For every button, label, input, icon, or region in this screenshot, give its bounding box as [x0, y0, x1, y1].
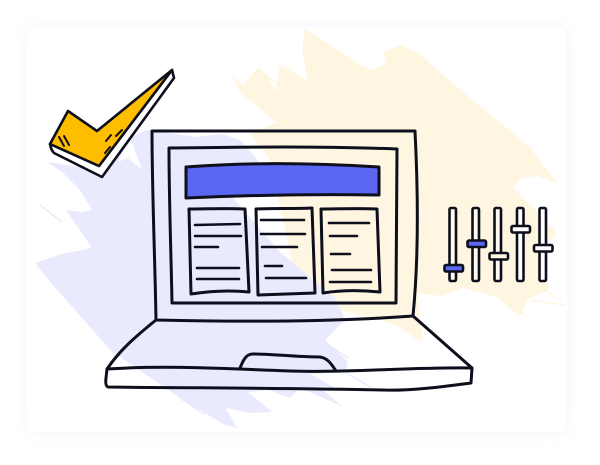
slider 1 — [444, 208, 463, 281]
trackpad notch — [240, 354, 336, 371]
white streaks — [118, 137, 142, 170]
slider 5 — [534, 208, 552, 281]
brush stroke: blue — [35, 130, 372, 428]
laptop keyboard deck — [107, 320, 156, 369]
check mark side — [50, 70, 174, 177]
laptop front edge — [106, 367, 472, 390]
content panel 1 — [189, 209, 249, 294]
laptop screen inner — [169, 147, 397, 303]
slider 3 — [490, 208, 508, 281]
header bar — [186, 164, 379, 198]
slider 2 — [468, 208, 486, 281]
laptop screen outer — [152, 131, 417, 321]
yellow brush thin streaks — [258, 66, 565, 317]
check mark face — [50, 70, 172, 166]
illustration card — [27, 27, 567, 432]
icon: check mark — [50, 70, 174, 177]
laptop — [106, 131, 472, 390]
sliders — [444, 208, 552, 281]
content panel 2 — [256, 208, 315, 295]
blue brush thin streaks — [40, 205, 372, 415]
slider 4 — [512, 208, 530, 281]
brush stroke: yellow — [232, 28, 565, 343]
content panel 3 — [321, 209, 380, 293]
